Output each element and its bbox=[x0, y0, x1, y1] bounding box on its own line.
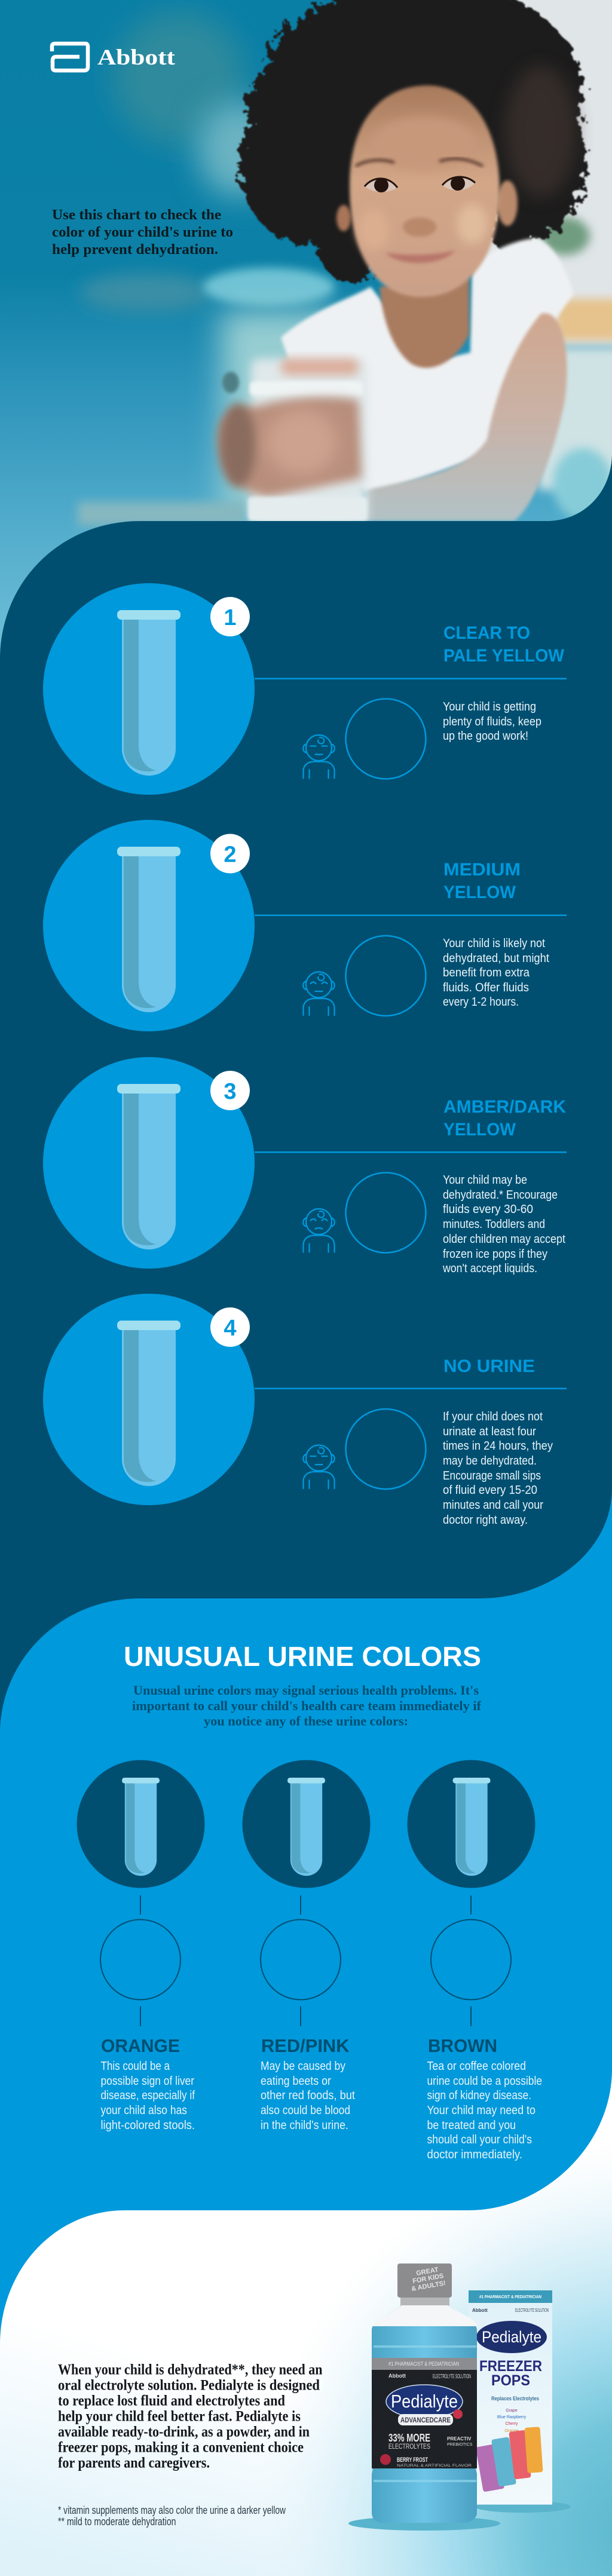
hero photo: child holding a glass of water bbox=[219, 0, 612, 523]
description: your child also has bbox=[100, 2104, 187, 2117]
section title: UNUSUAL URINE COLORS bbox=[124, 1641, 481, 1672]
color swatch circle bbox=[100, 1919, 180, 1999]
product: freezer pops box: Replaces Electrolytes bbox=[491, 2396, 539, 2402]
intro text: help prevent dehydration. bbox=[52, 242, 218, 258]
product text: help your child feel better fast. Pedialyte is bbox=[58, 2408, 301, 2425]
label: BROWN bbox=[428, 2035, 497, 2056]
body text: minutes and call your bbox=[443, 1499, 543, 1512]
product text: for parents and caregivers. bbox=[58, 2455, 210, 2471]
body text: minutes. Toddlers and bbox=[443, 1218, 545, 1231]
icon: baby content bbox=[303, 972, 335, 1015]
test tube circle bbox=[408, 1760, 536, 1888]
color swatch circle bbox=[345, 699, 426, 779]
product text: to replace lost fluid and electrolytes and bbox=[58, 2393, 285, 2409]
bottle body bbox=[372, 2305, 477, 2523]
section intro: you notice any of these urine colors: bbox=[204, 1714, 408, 1728]
cap: FOR KIDS bbox=[412, 2272, 444, 2285]
step 1: clear to pale yellow bbox=[43, 583, 567, 795]
test tube circle bbox=[43, 1057, 255, 1269]
description bbox=[261, 2060, 355, 2132]
bottle label bbox=[372, 2358, 477, 2468]
body text: Your child is getting bbox=[443, 700, 536, 713]
number badge bbox=[210, 1071, 250, 1110]
bottle label: PREACTIV bbox=[447, 2436, 472, 2442]
product: freezer pops box: Cherry bbox=[505, 2422, 518, 2426]
cap: & ADULTS! bbox=[411, 2280, 446, 2293]
bottle label: 33% MORE bbox=[388, 2432, 430, 2444]
body text: urinate at least four bbox=[443, 1425, 536, 1438]
test tube circle bbox=[76, 1760, 204, 1888]
product: freezer pops box: POPS bbox=[491, 2372, 530, 2389]
number badge: 2 bbox=[224, 843, 237, 868]
section intro bbox=[132, 1683, 482, 1728]
bottle label: ELECTROLYTES bbox=[388, 2442, 430, 2451]
description bbox=[427, 2060, 542, 2161]
heading: CLEAR TO bbox=[443, 623, 530, 643]
description: should call your child's bbox=[427, 2133, 532, 2146]
icon: baby neutral bbox=[303, 1445, 335, 1488]
body text: frozen ice pops if they bbox=[443, 1248, 547, 1261]
body text: Encourage small sips bbox=[443, 1469, 541, 1482]
description: other red foods, but bbox=[261, 2089, 355, 2102]
column: orange bbox=[76, 1760, 204, 2132]
product text: oral electrolyte solution. Pedialyte is designed bbox=[58, 2377, 320, 2394]
test tube circle bbox=[43, 1294, 255, 1505]
product: freezer pops box: Grape bbox=[506, 2409, 518, 2413]
bottle label: BERRY FROST bbox=[397, 2456, 428, 2464]
color swatch circle bbox=[261, 1919, 341, 1999]
heading: PALE YELLOW bbox=[443, 646, 565, 666]
photo backdrop bbox=[478, 0, 612, 520]
cap bbox=[397, 2263, 452, 2306]
product: freezer pops box: #1 PHARMACIST & PEDIATRICIAN bbox=[479, 2294, 541, 2299]
intro text: color of your child's urine to bbox=[52, 225, 233, 240]
product: freezer pops box: FREEZER bbox=[479, 2358, 542, 2375]
icon: baby uneasy bbox=[303, 1209, 335, 1252]
step 4: no urine bbox=[43, 1294, 567, 1527]
number badge bbox=[210, 1307, 250, 1347]
description: in the child's urine. bbox=[261, 2119, 348, 2132]
bottle label: ADVANCEDCARE bbox=[400, 2416, 451, 2424]
heading bbox=[443, 623, 565, 666]
heading: MEDIUM bbox=[443, 860, 521, 880]
body text: may be dehydrated. bbox=[443, 1454, 537, 1468]
eyes bbox=[365, 176, 475, 192]
description: light-colored stools. bbox=[100, 2119, 195, 2132]
number badge: 1 bbox=[224, 605, 237, 630]
description: disease, especially if bbox=[100, 2089, 195, 2102]
product text: freezer pops, making it a convenient choice bbox=[58, 2439, 304, 2456]
body text: of fluid every 15-20 bbox=[443, 1484, 537, 1497]
eyebrows bbox=[356, 159, 483, 166]
bottle label: ELECTROLYTE SOLUTION bbox=[433, 2373, 471, 2380]
body text: fluids. Offer fluids bbox=[443, 981, 529, 994]
bottle label: Pedialyte bbox=[391, 2391, 458, 2412]
panel: product bbox=[0, 2069, 612, 2576]
panel: urine color chart bbox=[0, 454, 612, 1793]
description: be treated and you bbox=[427, 2119, 516, 2132]
body text: won't accept liquids. bbox=[442, 1262, 537, 1275]
color swatch circle bbox=[431, 1919, 511, 1999]
description: Tea or coffee colored bbox=[427, 2060, 526, 2073]
nose bbox=[403, 218, 436, 237]
Abbott logo bbox=[52, 44, 176, 71]
step 2: medium yellow bbox=[43, 820, 567, 1031]
description: Your child may need to bbox=[427, 2104, 536, 2117]
body text: dehydrated, but might bbox=[443, 952, 549, 965]
product text bbox=[58, 2361, 323, 2471]
column: brown bbox=[408, 1760, 542, 2161]
test tube circle bbox=[243, 1760, 371, 1888]
section intro: Unusual urine colors may signal serious health problems. It's bbox=[133, 1683, 479, 1698]
product: freezer pops box: Blue Raspberry bbox=[497, 2415, 527, 2419]
mouth bbox=[385, 250, 455, 263]
body text bbox=[442, 1174, 565, 1275]
forearm bbox=[365, 313, 567, 521]
bottle label: Abbott bbox=[388, 2373, 406, 2379]
description: doctor immediately. bbox=[427, 2148, 522, 2161]
body text: dehydrated.* Encourage bbox=[443, 1189, 558, 1202]
body text: plenty of fluids, keep bbox=[443, 715, 541, 728]
popsicles bbox=[476, 2427, 543, 2492]
intro text: Use this chart to check the bbox=[52, 207, 221, 223]
hand and glass bbox=[219, 359, 368, 523]
body text: If your child does not bbox=[443, 1410, 543, 1423]
cap: GREAT bbox=[415, 2266, 439, 2277]
color swatch circle bbox=[345, 1172, 426, 1252]
step 3: amber/dark yellow bbox=[43, 1057, 567, 1275]
body text bbox=[443, 937, 549, 1009]
heading: NO URINE bbox=[443, 1356, 535, 1376]
intro text bbox=[52, 207, 233, 258]
body text: up the good work! bbox=[443, 730, 528, 743]
body text: Your child may be bbox=[443, 1174, 527, 1187]
panel: unusual urine colors bbox=[0, 1488, 612, 2390]
test tube circle bbox=[43, 583, 255, 795]
body text: older children may accept bbox=[443, 1233, 565, 1246]
product text: When your child is dehydrated**, they need an bbox=[58, 2361, 323, 2378]
test tube circle bbox=[43, 820, 255, 1031]
number badge bbox=[210, 834, 250, 874]
body text: Your child is likely not bbox=[443, 937, 545, 950]
logo wordmark: Abbott bbox=[97, 45, 176, 70]
body text: every 1-2 hours. bbox=[443, 996, 519, 1009]
column: red/pink bbox=[243, 1760, 371, 2132]
product: freezer pops box: Pedialyte bbox=[482, 2328, 541, 2346]
icon: baby neutral bbox=[303, 735, 335, 778]
description: possible sign of liver bbox=[100, 2075, 194, 2088]
heading bbox=[443, 1097, 566, 1140]
description: sign of kidney disease. bbox=[427, 2089, 531, 2102]
bottle label: NATURAL & ARTIFICIAL FLAVOR bbox=[397, 2464, 472, 2468]
hair bbox=[239, 0, 586, 283]
product: freezer pops box: ELECTROLYTE SOLUTION bbox=[515, 2308, 549, 2313]
color swatch circle bbox=[345, 936, 426, 1016]
section intro: important to call your child's health care team immediately if bbox=[132, 1698, 482, 1713]
heading: YELLOW bbox=[443, 883, 516, 902]
color swatch circle bbox=[345, 1409, 426, 1489]
body text: fluids every 30-60 bbox=[443, 1203, 533, 1216]
body text: times in 24 hours, they bbox=[443, 1439, 553, 1453]
description: urine could be a possible bbox=[427, 2075, 542, 2088]
number badge bbox=[210, 597, 250, 636]
product text: available ready-to-drink, as a powder, and in bbox=[58, 2424, 310, 2440]
hair highlight bbox=[505, 66, 577, 197]
heading bbox=[443, 860, 521, 902]
hero background bbox=[0, 0, 612, 717]
bottle label: PREBIOTICS bbox=[447, 2443, 473, 2447]
logo mark bbox=[52, 44, 88, 71]
footnotes bbox=[58, 2504, 286, 2528]
number badge: 4 bbox=[224, 1316, 237, 1341]
product: freezer pops box: Abbott bbox=[472, 2308, 488, 2313]
body text bbox=[443, 700, 541, 743]
face bbox=[336, 85, 518, 297]
footnotes: ** mild to moderate dehydration bbox=[58, 2516, 176, 2528]
heading: AMBER/DARK bbox=[443, 1097, 566, 1117]
product: freezer pops box: Orange bbox=[504, 2429, 519, 2433]
body text bbox=[443, 1410, 553, 1527]
description: also could be blood bbox=[261, 2104, 350, 2117]
description: May be caused by bbox=[261, 2060, 345, 2073]
shirt bbox=[281, 238, 574, 496]
product: pedialyte bottle bbox=[348, 2263, 500, 2531]
product: freezer pops box bbox=[469, 2290, 571, 2513]
body text: doctor right away. bbox=[443, 1514, 528, 1527]
heading: YELLOW bbox=[443, 1120, 516, 1140]
description: eating beets or bbox=[261, 2075, 331, 2088]
neck bbox=[380, 278, 469, 368]
label: ORANGE bbox=[101, 2035, 180, 2056]
bottle label: #1 PHARMACIST & PEDIATRICIAN bbox=[388, 2361, 459, 2367]
description bbox=[100, 2060, 195, 2132]
label: RED/PINK bbox=[261, 2035, 350, 2056]
body text: benefit from extra bbox=[443, 966, 530, 979]
footnotes: * vitamin supplements may also color the urine a darker yellow bbox=[58, 2504, 286, 2516]
number badge: 3 bbox=[224, 1079, 237, 1104]
description: This could be a bbox=[100, 2060, 170, 2073]
